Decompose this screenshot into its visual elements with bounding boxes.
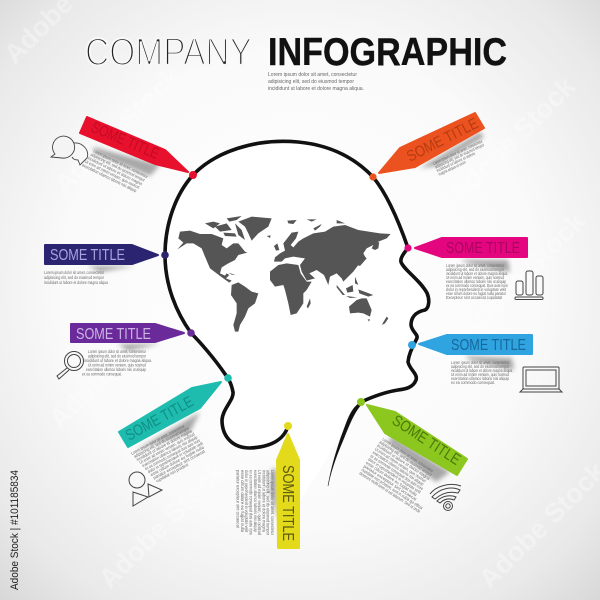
label: blue bbox=[419, 335, 532, 354]
text: navy: Lorem ipsum dolor sit amet, consectetur bbox=[44, 270, 104, 275]
text: red: Ut enim ad minim veniam, quis nostrud bbox=[84, 159, 141, 190]
intro text bbox=[268, 72, 364, 92]
text: magenta: Lorem ipsum dolor sit amet, consectetur bbox=[446, 263, 504, 268]
dot: green bbox=[357, 398, 365, 406]
text: blue: Lorem ipsum dolor sit amet, consectetur bbox=[451, 360, 509, 365]
head fill bbox=[165, 141, 429, 500]
orange tag bbox=[379, 113, 484, 173]
text: magenta: ex ea commodo consequat. Duis aute irure bbox=[446, 283, 508, 288]
purple title: SOME TITLE bbox=[76, 326, 151, 343]
watermark: Adobe Stock bbox=[443, 71, 582, 209]
text: orange: adipisicing elit, sed do eiusmod tempor bbox=[434, 142, 485, 170]
label: orange bbox=[379, 113, 484, 173]
text: yellow: pariatur excepteur sint occaecat bbox=[236, 470, 241, 529]
text: green: Ut enim ad minim veniam, quis nostrud bbox=[374, 446, 427, 484]
dot: orange bbox=[369, 173, 377, 181]
text: green: esse cillum dolore eu fugiat nulla bbox=[365, 460, 418, 497]
intro text: incididunt ut labore et dolore magna aliqua. bbox=[268, 86, 364, 92]
text: navy: adipisicing elit, sed do eiusmod tempor bbox=[44, 275, 104, 280]
label: navy bbox=[45, 245, 158, 264]
text: purple: ex ea commodo consequat. bbox=[82, 372, 122, 376]
text: magenta: incididunt ut labore et dolore magna aliqua. bbox=[446, 271, 508, 276]
green title: SOME TITLE bbox=[389, 412, 463, 469]
text: green bbox=[358, 436, 444, 514]
icon: bar chart bbox=[515, 271, 543, 300]
text: green: incididunt ut labore et dolore magna bbox=[376, 443, 431, 481]
text: yellow: esse cillum dolore eu fugiat nulla bbox=[240, 470, 245, 533]
text: purple: incididunt ut labore et dolore magna aliqua. bbox=[84, 358, 152, 363]
text: yellow: ex ea commodo consequat duis aute irure bbox=[248, 470, 254, 535]
text: magenta: Ut enim ad minim veniam, quis nostrud bbox=[446, 275, 504, 280]
text: yellow: exercitation ullamco laboris nisi aliquip bbox=[253, 470, 258, 532]
text: yellow: Ut enim ad minim veniam, quis nostrud bbox=[257, 470, 262, 535]
watermark: Adobe Stock bbox=[93, 456, 232, 594]
text: magenta bbox=[446, 263, 508, 300]
text: red bbox=[81, 147, 149, 195]
text: green: adipisicing elit, sed do eiusmod tempor bbox=[378, 440, 433, 478]
text: orange: magna aliqua ut enim bbox=[437, 159, 467, 177]
orange title: SOME TITLE bbox=[404, 115, 481, 166]
dot: navy bbox=[161, 251, 169, 259]
label: green bbox=[367, 405, 467, 475]
text: blue: Ut enim ad minim veniam, quis nostrud bbox=[451, 372, 509, 377]
text: teal: adipisicing elit, sed do eiusmod tempor bbox=[133, 425, 190, 459]
text: purple: exercitation ullamco laboris nisi ut aliquip bbox=[86, 367, 146, 372]
text: teal: incididunt ut labore et dolore magna bbox=[136, 428, 193, 462]
label: yellow bbox=[277, 434, 299, 548]
text: green: dolor in reprehenderit in voluptate velit bbox=[367, 457, 422, 495]
label: teal bbox=[119, 382, 221, 447]
text: purple: adipisicing elit, sed do eiusmod tempor bbox=[88, 354, 146, 358]
text: navy bbox=[44, 270, 108, 285]
label: magenta bbox=[415, 238, 527, 257]
text: teal: Lorem ipsum dolor sit amet, consectetur bbox=[130, 423, 186, 456]
text: red: exercitation ullamco laboris nisi aliquip bbox=[81, 162, 138, 193]
text: orange: Lorem ipsum dolor sit amet, consectetur bbox=[432, 138, 484, 166]
connector dots bbox=[161, 171, 416, 430]
text: red: adipisicing elit, sed do eiusmod tempor bbox=[90, 152, 146, 183]
magenta title: SOME TITLE bbox=[446, 240, 520, 257]
green tag bbox=[367, 405, 467, 475]
text: teal: Ut enim ad minim veniam, quis nostrud bbox=[138, 431, 196, 465]
dot: red bbox=[189, 171, 197, 179]
title bbox=[85, 31, 507, 74]
label: purple bbox=[71, 324, 184, 343]
icon: laptop bbox=[520, 367, 562, 392]
text: yellow: dolor in reprehenderit in voluptate velit bbox=[244, 470, 249, 533]
head silhouette bbox=[165, 141, 429, 500]
text: green: pariatur excepteur sint occaecat bbox=[363, 464, 418, 502]
dot: teal bbox=[224, 374, 232, 382]
text: yellow: adipisicing elit, sed do eiusmod tempor bbox=[266, 470, 271, 535]
label: red bbox=[80, 117, 188, 172]
text: red: Lorem ipsum dolor sit amet, consectetur bbox=[93, 148, 149, 179]
text: blue bbox=[451, 360, 513, 385]
text: magenta: Excepteur sint occaecat cupidatat bbox=[446, 295, 503, 300]
red title: SOME TITLE bbox=[88, 119, 161, 163]
watermark: Adobe Stock bbox=[43, 296, 182, 434]
yellow title: SOME TITLE bbox=[279, 465, 296, 541]
text: teal bbox=[130, 419, 210, 488]
blue tag bbox=[419, 335, 532, 354]
text: teal: dolor in reprehenderit in voluptate velit bbox=[147, 440, 204, 474]
icon: wifi bbox=[430, 484, 461, 510]
text: green: cupidatat non proident, sunt in culpa qui officia bbox=[361, 467, 424, 511]
magenta tag bbox=[415, 238, 527, 257]
text: teal: pariatur excepteur sint occaecat bbox=[152, 448, 206, 480]
text: purple: Ut enim ad minim veniam, quis nostrud bbox=[88, 362, 146, 368]
teal tag bbox=[119, 382, 221, 447]
head outline bbox=[165, 141, 429, 448]
dot: blue bbox=[408, 341, 416, 349]
shadows under labels bbox=[88, 132, 514, 520]
text: teal: exercitation ullamco laboris nisi aliquip bbox=[141, 434, 199, 468]
text: navy: incididunt ut labore et dolore magna aliqua bbox=[44, 280, 108, 285]
text: purple bbox=[82, 349, 152, 376]
icon: shapes bbox=[129, 472, 162, 506]
title: infographic: INFOGRAPHIC bbox=[268, 31, 507, 74]
dot: magenta bbox=[404, 244, 412, 252]
text: yellow bbox=[236, 470, 275, 535]
text: green: exercitation ullamco laboris nisi aliquip bbox=[372, 450, 425, 487]
title: company: COMPANY bbox=[85, 31, 252, 74]
text: green: ex ea commodo consequat duis aute irure bbox=[369, 453, 425, 491]
text: magenta: esse cillum dolore eu fugiat nulla pariatur bbox=[446, 291, 506, 296]
intro text: adipisicing elit, sed do eiusmod tempor bbox=[268, 79, 354, 85]
text: yellow: incididunt ut labore et dolore magna bbox=[261, 470, 266, 532]
dot: yellow bbox=[284, 422, 292, 430]
icon: magnifier bbox=[57, 352, 84, 379]
blue title: SOME TITLE bbox=[451, 337, 526, 354]
text: teal: esse cillum dolore eu fugiat nulla bbox=[149, 444, 205, 477]
text: blue: ex ea commodo consequat. bbox=[451, 380, 495, 385]
text: green: deserunt mollit anim id est laborum. Sed ut unde bbox=[358, 470, 422, 514]
dot: purple bbox=[187, 329, 195, 337]
watermark: Adobe Stock bbox=[48, 61, 187, 199]
text: orange: incididunt ut labore et dolore bbox=[436, 151, 476, 173]
text: purple: Lorem ipsum dolor sit amet, consectetur bbox=[88, 349, 146, 354]
teal title: SOME TITLE bbox=[123, 393, 197, 444]
text: teal: cupidatat non proident bbox=[155, 462, 190, 483]
text: blue: incididunt ut labore et dolore magna aliqua. bbox=[451, 368, 513, 373]
purple tag bbox=[71, 324, 184, 342]
credit text: Adobe Stock | #101185834 bbox=[9, 470, 21, 590]
text: magenta: dolor in reprehenderit in voluptate velit bbox=[446, 287, 507, 292]
text: green: Lorem ipsum dolor sit amet, consectetur bbox=[381, 437, 435, 474]
neck taper bbox=[328, 402, 362, 486]
text: magenta: exercitation ullamco laboris nisi ut aliquip bbox=[446, 279, 506, 284]
americas and greenland bbox=[177, 216, 272, 332]
text: magenta: adipisicing elit, sed do eiusmod tempor bbox=[446, 267, 504, 272]
yellow tag bbox=[277, 434, 299, 548]
navy tag bbox=[45, 245, 158, 264]
text: blue: adipisicing elit, sed do eiusmod tempor bbox=[451, 364, 509, 369]
watermark: Adobe Stock bbox=[453, 206, 592, 344]
navy title: SOME TITLE bbox=[50, 247, 125, 264]
icon: chat bubbles bbox=[51, 136, 88, 165]
text: teal: ex ea commodo consequat duis aute irure bbox=[144, 437, 201, 471]
intro text: Lorem ipsum dolor sit amet, consectetur bbox=[268, 72, 357, 78]
red tag bbox=[80, 117, 188, 172]
old world bbox=[270, 219, 391, 325]
text: yellow: Lorem ipsum dolor sit amet, consectetur bbox=[270, 470, 275, 535]
text: orange bbox=[432, 138, 489, 177]
text: blue: exercitation ullamco laboris nisi aliquip bbox=[451, 376, 509, 381]
world map bbox=[177, 216, 391, 332]
text: red: incididunt ut labore et dolore magna bbox=[87, 155, 143, 186]
